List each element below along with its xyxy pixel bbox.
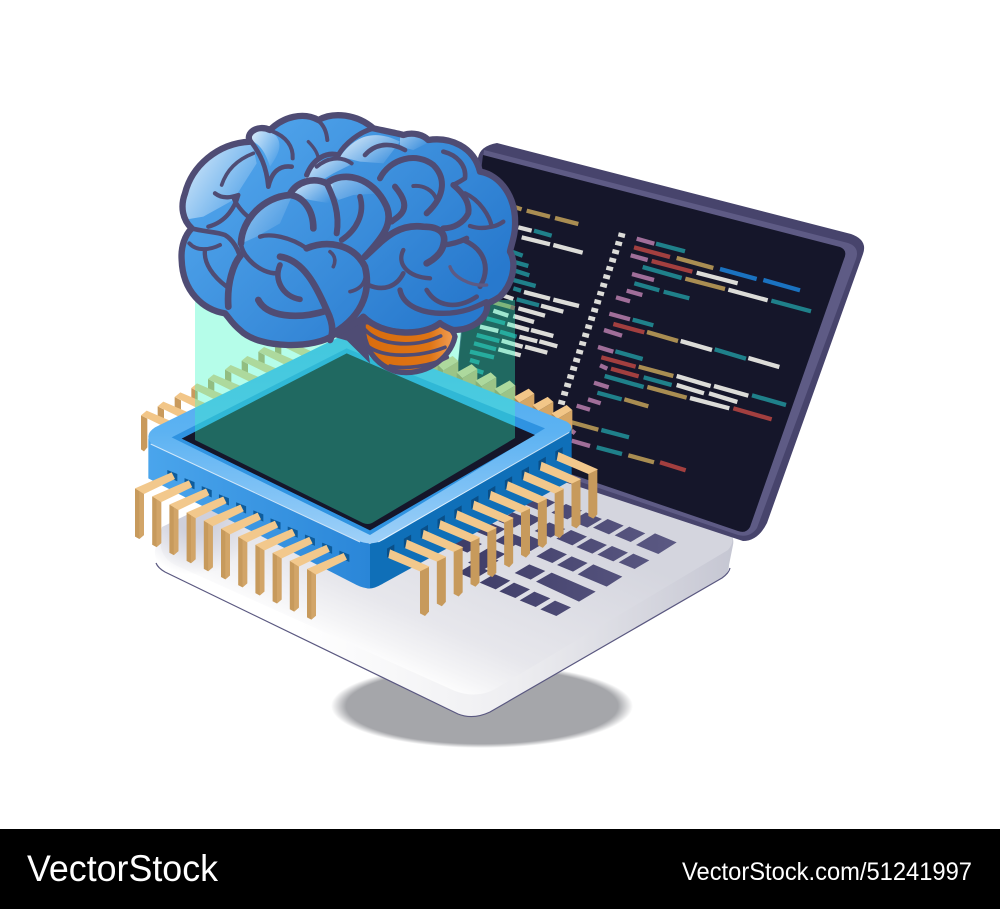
watermark logo: VectorStock: [27, 847, 218, 889]
screen display: [450, 155, 845, 532]
front-right pins: [387, 447, 598, 616]
code lines: [470, 207, 811, 470]
brain outline: [182, 115, 515, 345]
chip top rim: [148, 336, 571, 543]
brain folds: [189, 121, 503, 340]
screen frame outer: [450, 143, 864, 541]
watermark bar: [0, 829, 1000, 909]
ground shadow: [331, 664, 633, 748]
cerebellum: [363, 322, 455, 373]
front pins: [135, 447, 598, 620]
dotted column: [558, 234, 625, 403]
chip die: [182, 353, 535, 530]
keyboard: [451, 496, 677, 616]
back-left pins: [141, 338, 314, 451]
chip left side: [148, 438, 370, 588]
watermark id: VectorStock.com/51241997: [682, 858, 972, 886]
processor chip: [141, 336, 572, 589]
chip right side: [363, 428, 572, 589]
chip recess bevel: [172, 348, 545, 535]
laptop screen: [450, 143, 864, 541]
laptop base: [156, 482, 734, 718]
back-right pins: [400, 340, 572, 440]
screen frame inner band: [450, 150, 857, 536]
front-left pins: [135, 470, 349, 620]
brain: [182, 115, 515, 373]
hologram beam: [195, 300, 515, 524]
brain stem: [331, 316, 370, 363]
brain highlights: [183, 130, 427, 243]
brain fill: [182, 115, 515, 345]
